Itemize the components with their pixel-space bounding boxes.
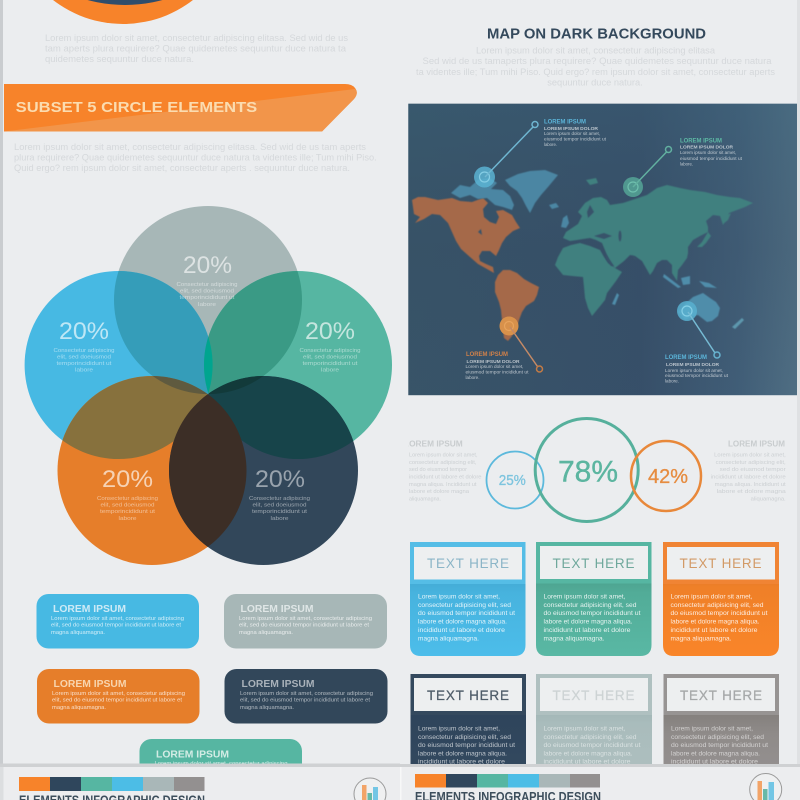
pill: navy (224, 669, 388, 724)
venn label: green: elit, sed doeiusmod (303, 354, 357, 360)
intro paragraph: quidemetes sequuntur duce natura. (45, 54, 194, 64)
pill: blue: magna aliquamagna. (51, 630, 105, 636)
left edge strip (0, 0, 3, 766)
heading: map on dark background: MAP ON DARK BACKGROUND (487, 26, 706, 42)
card: dark gray: incididunt ut labore et dolore (671, 758, 758, 766)
callout: bottom right blue pin: eiusmod tempor incididunt ut (665, 373, 729, 378)
pill: navy: magna aliquamagna. (240, 705, 294, 711)
callout: top left blue pin: Lorem ipsum dolor sit amet, (544, 131, 600, 136)
ring 25% (486, 452, 544, 508)
pill: blue (36, 594, 199, 648)
venn label: orange: labore (118, 516, 137, 522)
venn label: gray: elit, sed doeiusmod (180, 288, 234, 294)
callout: orange pin: eiusmod tempor incididunt ut (466, 370, 529, 374)
card: light gray: consectetur adipisicing elit, sed (544, 734, 637, 741)
pill: green (140, 739, 302, 794)
map paragraph: Lorem ipsum dolor sit amet, consectetur adipiscing elitasa (476, 46, 715, 56)
top orange circle fragment (0, 0, 268, 24)
colour strip (19, 777, 204, 791)
venn label: blue: temporincididunt ut (56, 361, 112, 367)
pill: orange: elit, sed do eiusmod tempor incididunt ut labore et (52, 698, 182, 704)
pill: orange: magna aliquamagna. (52, 705, 106, 711)
north and south america (412, 197, 539, 341)
callout: top right green pin: LOREM IPSUM (680, 138, 722, 144)
inland seas (478, 205, 638, 266)
callout: top left blue pin: eiusmod tempor incididunt ut (544, 136, 607, 142)
pill: gray: Lorem ipsum dolor sit amet, consectetur adipiscing (239, 616, 372, 622)
card: blue: labore et dolore magna aliqua. (418, 618, 507, 626)
card: navy: TEXT HERE (427, 688, 509, 703)
callout: bottom right blue pin: labore. (665, 378, 679, 384)
card: orange: magna aliquamagna. (670, 636, 732, 642)
pill: blue: LOREM IPSUM (53, 604, 126, 615)
ring 25%: 25% (499, 473, 526, 489)
subset paragraph: Quid ergo? rem ipsum dolor sit amet, consectetur aperts . sequuntur duce natura. (14, 163, 350, 173)
stats: right text block: sed do eiusmod tempor (720, 467, 786, 473)
venn label: navy: elit, sed doeiusmod (252, 502, 307, 508)
banner heading: SUBSET 5 CIRCLE ELEMENTS (16, 99, 257, 116)
card: green: do eiusmod tempor incididunt ut (544, 610, 641, 617)
venn label: green: 20% (305, 318, 355, 345)
banner: subset 5 circle elements (4, 84, 357, 132)
map panel (408, 104, 797, 395)
footer panel: left (0, 764, 400, 800)
pill: navy: LOREM IPSUM (242, 679, 314, 690)
card: green (536, 542, 652, 656)
intro paragraph (45, 33, 349, 64)
card: green: labore et dolore magna aliqua. (544, 618, 633, 626)
stats: right text block: LOREM IPSUM (728, 440, 785, 448)
venn label: orange: temporincididunt ut (100, 509, 156, 515)
card: dark gray (664, 674, 779, 774)
card: navy (410, 674, 526, 774)
pill: orange: Lorem ipsum dolor sit amet, consectetur adipiscing (52, 691, 185, 697)
venn label: navy (249, 466, 310, 522)
colour strip (415, 774, 600, 788)
stats: right text block: Lorem ipsum dolor sit amet, (714, 452, 786, 458)
ring 78% (535, 418, 638, 522)
callout: bottom right blue pin: LOREM IPSUM DOLOR (666, 362, 720, 367)
inner navy circle (0, 0, 268, 5)
stats: left text block: consectetur adipiscing elit, (409, 460, 477, 466)
callout: bottom right blue pin (665, 301, 729, 384)
venn label: blue: Consectetur adipiscing (54, 348, 115, 354)
pill: navy: Lorem ipsum dolor sit amet, consectetur adipiscing (240, 691, 373, 697)
card: blue: incididunt ut labore et dolore (418, 627, 505, 634)
venn label: navy: temporincididunt ut (252, 509, 308, 515)
card: navy: consectetur adipisicing elit, sed (418, 734, 511, 741)
stats: right text block: labore et dolore magna (717, 489, 786, 495)
card: dark gray: labore et dolore magna aliqua. (671, 750, 760, 758)
venn label: gray: Consectetur adipiscing (176, 282, 238, 288)
venn label: gray: labore (198, 302, 216, 308)
callout: top right green pin: LOREM IPSUM DOLOR (680, 144, 734, 150)
right edge strip (797, 0, 800, 766)
venn label: blue: elit, sed doeiusmod (57, 354, 111, 360)
callout: bottom right blue pin: LOREM IPSUM (665, 354, 707, 361)
callout: top left blue pin: LOREM IPSUM DOLOR (544, 126, 599, 131)
callout: top left blue pin: labore. (544, 142, 557, 147)
map paragraph: sequuntur duce natura. (547, 78, 643, 88)
pill: gray: magna aliquamagna. (239, 630, 293, 636)
card: green: Lorem ipsum dolor sit amet, (544, 594, 626, 600)
card: light gray: labore et dolore magna aliqua. (544, 750, 633, 758)
pill: blue: elit, sed do eiusmod tempor incididunt ut labore et (51, 622, 181, 628)
card: orange: Lorem ipsum dolor sit amet, (670, 594, 753, 600)
card: orange: do eiusmod tempor incididunt ut (670, 610, 768, 617)
intro paragraph: tam aperts plura requirere? Quae quidemetes sequuntur duce natura ta (45, 44, 346, 54)
footer panel: right (400, 764, 800, 800)
ring 78%: 78% (558, 456, 618, 488)
card: blue: TEXT HERE (427, 556, 509, 571)
stats: right text block: aliquamagna. (751, 496, 786, 502)
stats: right text block: incididunt ut labore et dolore (711, 474, 786, 480)
callout: bottom right blue pin: Lorem ipsum dolor sit amet, (665, 368, 723, 373)
venn label: navy: labore (270, 516, 289, 522)
stats: right text block: consectetur adipiscing elit, (716, 460, 786, 466)
callout: top left blue pin: LOREM IPSUM (544, 118, 586, 126)
stats: left text block: incididunt ut labore et dolore (409, 474, 482, 480)
card: light gray: incididunt ut labore et dolore (544, 758, 631, 766)
stats: right text block (711, 440, 786, 502)
pill: gray: elit, sed do eiusmod tempor incididunt ut labore et (239, 622, 369, 628)
venn label: gray: temporincididunt ut (180, 295, 235, 301)
card: orange: incididunt ut labore et dolore (670, 627, 758, 634)
card: green: incididunt ut labore et dolore (544, 627, 631, 634)
callout: orange pin: Lorem ipsum dolor sit amet, (466, 364, 524, 369)
eurasia and africa (555, 178, 753, 316)
card: orange (663, 542, 779, 656)
pill: green: Lorem ipsum dolor sit amet, consectetur adipiscing (154, 761, 288, 767)
card: blue (410, 542, 526, 656)
venn label: navy: 20% (255, 466, 305, 493)
subset paragraph: Lorem ipsum dolor sit amet, consectetur adipiscing elitasa. Sed wid de us tam aperts (14, 142, 367, 152)
callout: orange pin (466, 316, 542, 380)
pill: orange (37, 669, 200, 724)
card: dark gray: TEXT HERE (680, 688, 762, 703)
callout: top right green pin: Lorem ipsum dolor sit amet, (680, 150, 736, 155)
pill: gray: LOREM IPSUM (240, 604, 314, 615)
card: orange: labore et dolore magna aliqua. (670, 618, 760, 626)
venn label: orange: Consectetur adipiscing (97, 496, 158, 502)
venn label: green (300, 318, 361, 374)
stats: left text block: magna aliqua. Incididunt ut (409, 482, 477, 488)
venn label: green: temporincididunt ut (302, 361, 358, 367)
callout: orange pin: LOREM IPSUM DOLOR (466, 359, 520, 364)
subset paragraph (14, 142, 377, 173)
card: navy: Lorem ipsum dolor sit amet, (418, 726, 500, 732)
ring 42%: 42% (648, 466, 688, 488)
callout: orange pin: LOREM IPSUM (466, 351, 508, 358)
stats: left text block (404, 440, 482, 502)
intro paragraph: Lorem ipsum dolor sit amet, consectetur adipiscing elitasa. Sed wid de us (45, 33, 349, 43)
map paragraph: Sed wid de us tamaperts plura requirere? Quae quidemetes sequuntur duce natura (422, 56, 772, 66)
subset paragraph: plura requirere? Quae quidemetes sequuntur duce natura ta videntes ille; Tum mihi Piso. (14, 152, 377, 162)
icon: bar chart badge (354, 778, 386, 800)
venn label: blue (54, 318, 115, 374)
card: green: magna aliquamagna. (544, 636, 605, 642)
pill: navy: elit, sed do eiusmod tempor incididunt ut labore et (240, 698, 370, 704)
venn label: green: labore (321, 368, 339, 374)
stats: right text block: magna aliqua. Incididunt ut (715, 482, 786, 488)
map paragraph: ta videntes ille; Tum mihi Piso. Quid ergo? rem ipsum dolor sit amet, consectetur aperts (416, 67, 776, 77)
callout: top right green pin (623, 138, 743, 197)
pill: gray (224, 594, 387, 648)
venn diagram: five circles (25, 206, 392, 565)
card: dark gray: consectetur adipisicing elit, sed (671, 734, 764, 741)
venn label: orange: elit, sed doeiusmod (100, 502, 155, 508)
card: blue: magna aliquamagna. (418, 636, 479, 642)
madagascar, indonesia, australia, new zealand (612, 274, 744, 329)
card: light gray (536, 674, 652, 774)
card: dark gray: Lorem ipsum dolor sit amet, (671, 726, 753, 732)
card: navy: labore et dolore magna aliqua. (418, 750, 507, 758)
card: dark gray: do eiusmod tempor incididunt ut (671, 742, 768, 749)
card: green: consectetur adipisicing elit, sed (544, 602, 637, 609)
pill: blue: Lorem ipsum dolor sit amet, consectetur adipiscing (51, 616, 184, 622)
venn label: gray: 20% (183, 252, 232, 279)
venn label: blue: 20% (59, 318, 109, 345)
venn label: green: Consectetur adipiscing (300, 348, 361, 354)
callout: top right green pin: eiusmod tempor incididunt ut (680, 156, 743, 161)
card: navy: do eiusmod tempor incididunt ut (418, 742, 515, 749)
stats: three ring percentages (486, 418, 701, 522)
card: orange: consectetur adipisicing elit, sed (670, 602, 764, 609)
venn label: orange (97, 466, 158, 522)
card: blue: Lorem ipsum dolor sit amet, (418, 594, 500, 600)
card: green: TEXT HERE (552, 556, 634, 571)
card: blue: consectetur adipisicing elit, sed (418, 602, 511, 609)
card: light gray: Lorem ipsum dolor sit amet, (544, 726, 626, 732)
venn label: orange: 20% (102, 466, 153, 493)
icon: bar chart badge (750, 774, 782, 800)
pill: orange: LOREM IPSUM (54, 679, 126, 690)
card: light gray: do eiusmod tempor incididunt ut (544, 742, 641, 749)
card: blue: do eiusmod tempor incididunt ut (418, 610, 515, 617)
stats: left text block: LOREM IPSUM (404, 440, 463, 448)
stats: left text block: Lorem ipsum dolor sit amet, (409, 452, 478, 458)
callout: top left blue pin (474, 118, 607, 188)
venn label: navy: Consectetur adipiscing (249, 496, 310, 502)
stats: left text block: labore et dolore magna (409, 489, 469, 495)
stats: left text block: aliquamagna. (409, 496, 441, 502)
venn label: blue: labore (75, 368, 93, 374)
greenland and arctic canada (451, 170, 569, 228)
card: light gray: TEXT HERE (552, 688, 634, 703)
callout: orange pin: labore. (466, 375, 480, 380)
map paragraph (416, 46, 776, 88)
stats: left text block: sed do eiusmod tempor (409, 467, 467, 473)
ring 42% (631, 441, 701, 511)
callout: top right green pin: labore. (680, 162, 693, 166)
card: orange: TEXT HERE (680, 556, 762, 571)
pill: green: LOREM IPSUM (156, 750, 229, 760)
card: navy: incididunt ut labore et dolore (418, 758, 505, 766)
venn label: gray (176, 252, 238, 308)
